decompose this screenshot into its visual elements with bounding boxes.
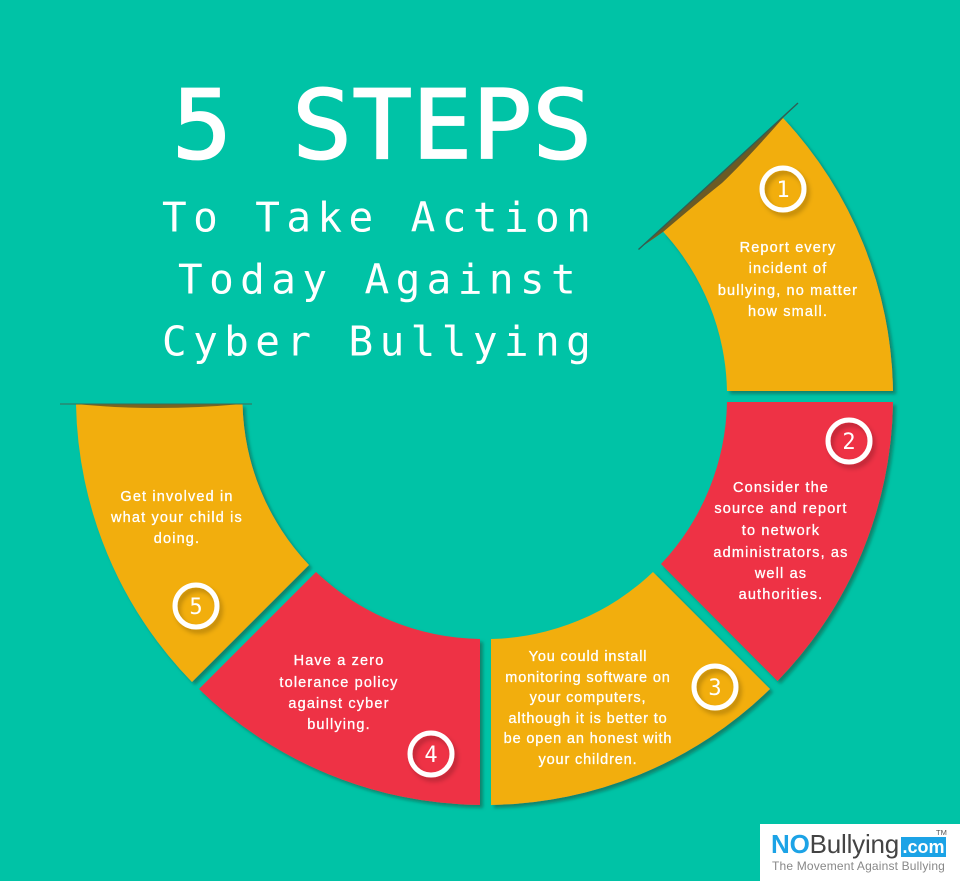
subheading line 2: Today Against [178, 256, 582, 304]
text 3: your children. [539, 752, 637, 768]
logo wordmark: NOBullying [771, 829, 899, 859]
text 2: to network [742, 523, 820, 539]
text 4: tolerance policy [279, 675, 399, 691]
number badge 2: 2 [842, 430, 856, 455]
text 3: your computers, [530, 690, 646, 706]
logo trademark: TM [936, 828, 947, 837]
step 1 panel [638, 103, 893, 391]
number badge 5 [175, 585, 217, 627]
segment 2 [661, 402, 893, 681]
text 5 [110, 489, 243, 547]
text 2 [713, 480, 849, 603]
number badge 1 [762, 168, 804, 210]
text 4: bullying. [307, 717, 371, 733]
step 2 panel [661, 402, 893, 681]
text 1 [718, 240, 858, 320]
text 2: authorities. [739, 587, 823, 603]
step 5 panel [60, 404, 309, 682]
text 3: You could install [529, 649, 647, 665]
text 4: against cyber [288, 696, 390, 712]
text 4: Have a zero [294, 653, 384, 669]
segment 4 [199, 572, 480, 805]
text 2: well as [754, 566, 807, 582]
segment 3 [491, 572, 770, 805]
logo tagline: The Movement Against Bullying [772, 859, 945, 873]
text 1: how small. [748, 304, 828, 320]
number badge 4: 4 [424, 743, 438, 768]
title [162, 70, 597, 366]
text 5: what your child is [110, 510, 243, 526]
text 4 [279, 653, 399, 733]
number badge 3 [694, 666, 736, 708]
text 3 [504, 649, 672, 768]
segment 5 [76, 404, 309, 682]
number badge 4 [410, 733, 452, 775]
text 3: monitoring software on [505, 670, 671, 686]
text 2: Consider the [733, 480, 829, 496]
number badge 1: 1 [776, 178, 790, 203]
text 2: administrators, as [713, 545, 849, 561]
fold crease 1 [638, 103, 798, 250]
text 1: bullying, no matter [718, 283, 858, 299]
text 3: be open an honest with [504, 731, 672, 747]
text 5: Get involved in [120, 489, 234, 505]
number badge 3: 3 [708, 676, 722, 701]
text 5: doing. [154, 531, 200, 547]
number badge 2 [828, 420, 870, 462]
subheading line 3: Cyber Bullying [162, 318, 597, 366]
text 3: although it is better to [508, 711, 668, 727]
heading: 5 STEPS: 5 STEPS [172, 70, 592, 180]
number badge 5: 5 [189, 595, 203, 620]
text 1: Report every [740, 240, 836, 256]
fold crease 5 [60, 404, 252, 408]
logo [760, 824, 960, 881]
step 4 panel [199, 572, 480, 805]
step 3 panel [491, 572, 770, 805]
text 2: source and report [714, 501, 848, 517]
text 1: incident of [749, 261, 827, 277]
segment 1 [663, 118, 893, 391]
subheading line 1: To Take Action [162, 194, 597, 242]
logo .com box: .com [902, 837, 945, 857]
